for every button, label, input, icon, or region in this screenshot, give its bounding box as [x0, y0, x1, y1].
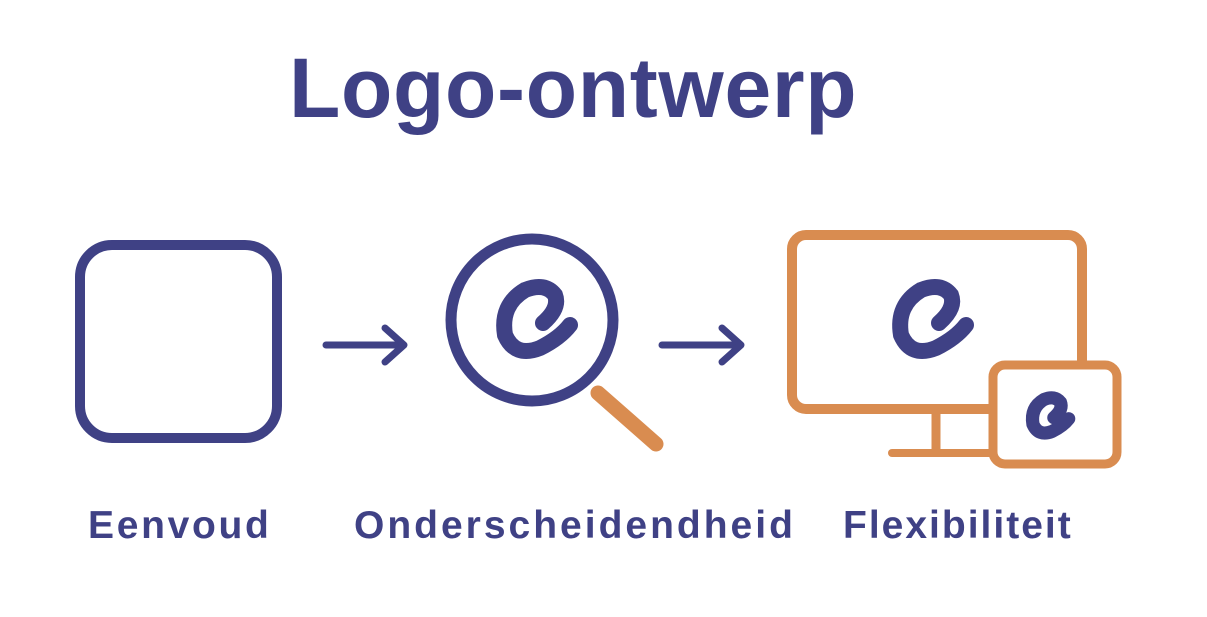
icon: monitor with tablet	[792, 235, 1117, 464]
label: Eenvoud: Eenvoud	[88, 504, 272, 547]
icon: rounded square	[80, 245, 277, 438]
icon: magnifier	[451, 239, 656, 444]
label: Onderscheidendheid: Onderscheidendheid	[354, 504, 796, 547]
title: Logo-ontwerp	[289, 41, 857, 135]
arrow 1	[326, 328, 404, 362]
arrow 2	[662, 328, 741, 362]
label: Flexibiliteit: Flexibiliteit	[843, 504, 1073, 547]
